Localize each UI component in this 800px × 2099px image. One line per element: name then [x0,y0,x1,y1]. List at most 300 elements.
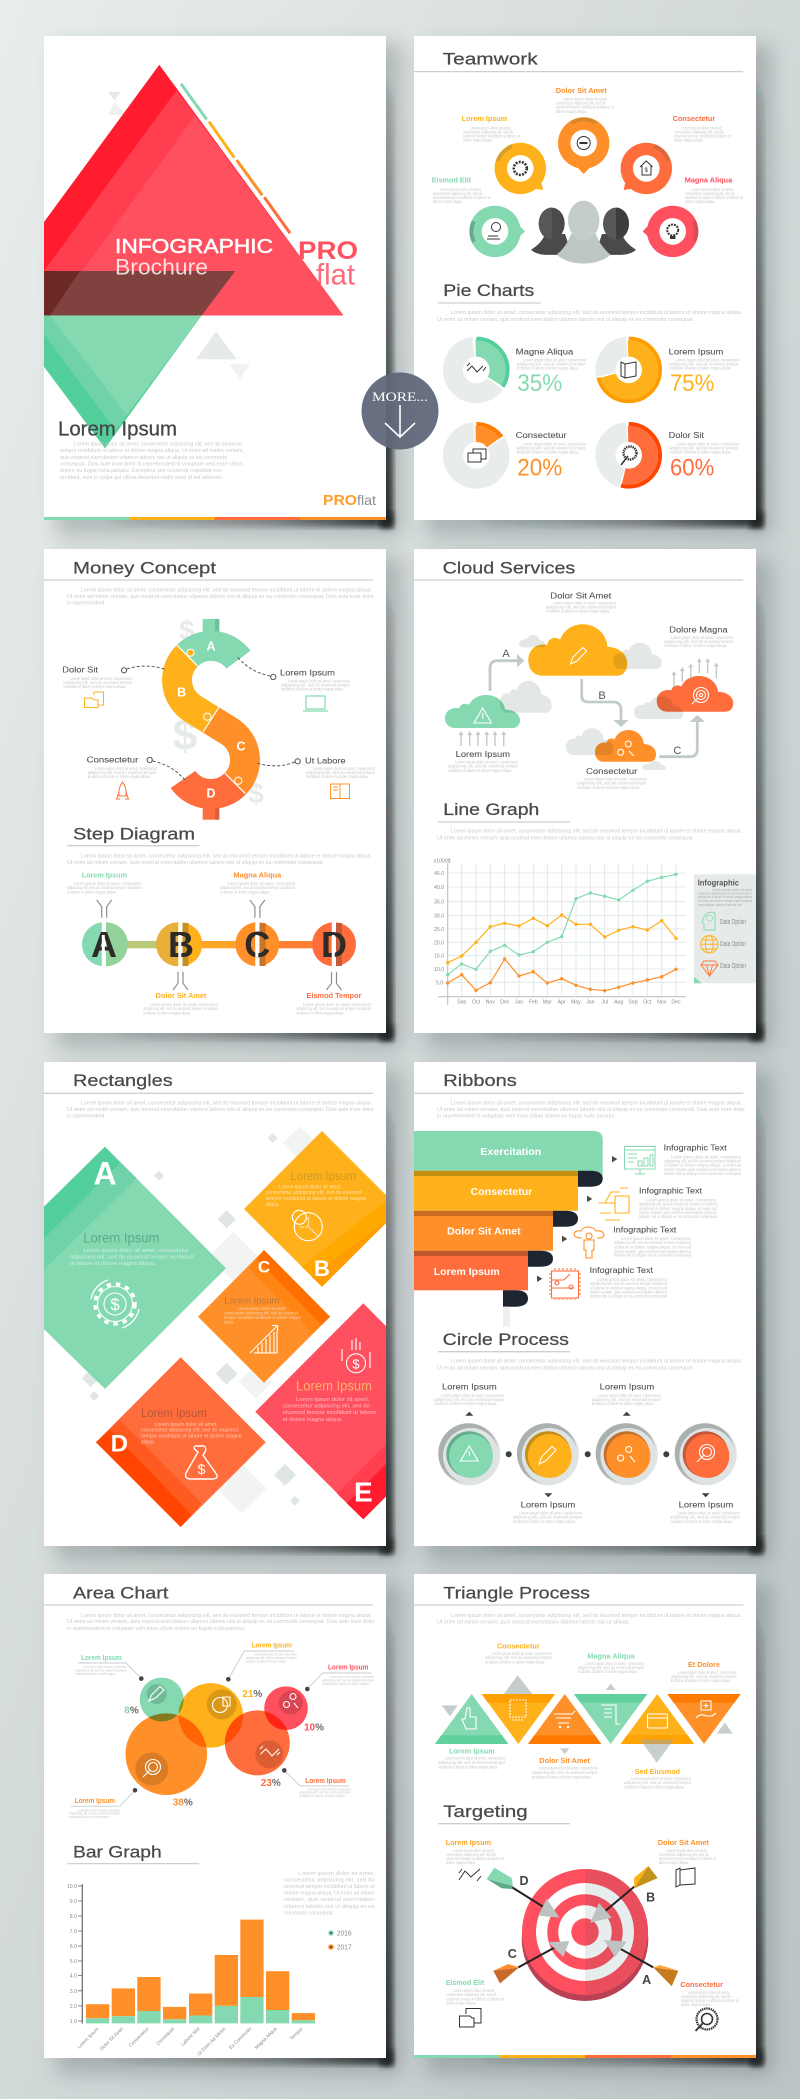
diagram: dollar puzzle [177,619,246,820]
ribbon: lorem ipsum [414,1256,528,1307]
dashed edge strokes [181,84,290,233]
labels: triangle process: Lorem ipsum dolor sit amet, consectetur [538,1766,598,1771]
body: rectangles: Ut enim ad minim veniam, quis nostrud exercitation ullamco laboris nisi ut aliquip ex ea commodo consequat. Duis aute irure dolor [67,1107,374,1113]
labels: step diagram: Lorem ipsum dolor sit amet, consectetur [227,881,295,886]
body: circle process [437,1358,742,1372]
body: bar graph: veniam, quis nostrud exercitation [284,1897,375,1903]
labels: teamwork: consectetur adipiscing elit, sed do [674,130,724,134]
chart legend panel: incididunt ut labore et dolore magna aliqua [698,895,752,899]
line chart: 35.0 [434,900,444,906]
legend: bar chart [328,1929,352,1952]
heading: teamwork: Teamwork [443,50,538,69]
diamond D: Lorem Ipsum [141,1408,207,1420]
pie chart: 35%: Lorem ipsum dolor sit amet, consectetur [523,358,586,362]
ribbon text blocks: Lorem ipsum dolor sit amet, consectetur [621,1236,691,1241]
icon: folder [460,2008,481,2027]
cover body text: consequat. Duis aute irure dolor in reprehenderit in voluptate velit esse cillum [60,462,244,468]
line chart: Jul [601,1000,608,1006]
body: pie charts [437,310,742,323]
chart legend panel: consectetur adipiscing elit sed do eiusmod tempor [698,892,753,896]
labels: teamwork: Lorem ipsum dolor sit amet, [440,187,482,192]
step D [312,920,356,968]
labels: teamwork: eiusmod tempor incididunt ut labore et [556,105,614,110]
legend: bar chart: 2017 [337,1943,352,1952]
icon: book [330,784,350,798]
labels: step diagram: Eismod Tempor [306,991,362,1000]
triangle: yellow up [621,1694,694,1744]
arrow letters [502,648,681,757]
icon: person cloud [574,1227,604,1258]
labels: money concept: incididunt ut labore et dolore magna aliqua. [63,684,126,689]
body: pie charts: Ut enim ad minim veniam, quis nostrud exercitation ullamco laboris nisi ut aliquip ex ea commodo consequat. [437,317,694,323]
bar chart: 6.0 [70,1944,77,1950]
chart legend panel: Data Option [720,941,746,948]
labels: teamwork: consectetur adipiscing elit, sed do [433,191,483,196]
diagram: dollar puzzle: B [177,686,186,700]
chart legend panel: Ut enim ad minim veniam quis nostrud [698,899,752,903]
line chart: 45.0 [434,871,444,877]
panel: triangle process and targeting [414,1584,756,2058]
labels: targeting: Consectetur [680,1980,723,1989]
labels: triangle process: Dolor Sit Amet [539,1756,590,1765]
more badge [362,372,438,450]
circle step 3 [596,1423,658,1485]
ribbon text blocks: minim veniam, quis nostrud exercitation ullamco [614,1249,691,1254]
labels: cloud services: Lorem ipsum dolor sit amet, consectetur [455,760,518,764]
body: bar graph [284,1871,375,1917]
labels: targeting: Lorem ipsum dolor sit amet, [688,1990,730,1995]
diamond C: aliqua. [224,1319,234,1324]
labels: area chart: incididunt ut labore et dolore magna [322,1682,370,1686]
bar chart: 5.0 [70,1959,77,1965]
labels: teamwork: Lorem Ipsum [462,114,507,123]
panel: rectangles [44,1074,386,1527]
ribbon text blocks: Lorem ipsum dolor sit amet, consectetur [646,1197,716,1202]
heading: targeting: Targeting [443,1802,528,1821]
ribbon: consectetur: Consectetur [471,1186,532,1198]
diamond E: Lorem Ipsum [296,1379,372,1394]
labels: circle process: Lorem ipsum dolor sit amet, consectetur [598,1393,661,1398]
labels: money concept: incididunt ut labore et dolore magna aliqua. [306,774,369,779]
labels: area chart: Lorem ipsum dolor sit amet, consectetur [77,1808,120,1812]
body: rectangles [67,1100,374,1120]
labels: triangle process: Magna Aliqua [587,1652,635,1661]
pie chart: 60% [597,424,739,487]
labels: targeting: consectetur adipiscing elit, sed do [659,1852,709,1857]
labels: targeting: consectetur adipiscing elit, sed do [681,1994,731,1999]
bubble chart [126,1678,308,1795]
body: ribbons: Ut enim ad minim veniam, quis nostrud exercitation ullamco laboris nisi ut aliquip ex ea commodo consequat. Duis aute irure dolor [437,1107,745,1113]
bar chart: 8.0 [70,1914,77,1920]
labels: area chart: adipiscing elit, sed do eiusmod tempor [75,1668,127,1672]
leader bullets [133,1676,310,1793]
diamond E: E [354,1477,373,1508]
labels: step diagram: Lorem ipsum dolor sit amet, consectetur [74,881,141,886]
pie chart: 75%: adipiscing elit, sed do eiusmod tempor [669,362,739,366]
labels: targeting: Dolor Sit Amet [658,1838,709,1847]
labels: cloud services: adipiscing elit, sed do eiusmod tempor [546,604,616,610]
ribbon text blocks: laboris nisi ut aliquip ex ea commodo consequat [639,1214,717,1219]
labels: circle process: adipiscing elit, sed do eiusmod tempor [434,1397,504,1402]
bar chart: Dolor Sit Amet [99,2026,125,2052]
heading: cloud services: Cloud Services [443,558,575,577]
small triangles [465,1412,710,1497]
triangle: green down [574,1694,647,1744]
line chart: Oct [643,1000,652,1006]
bar chart: Ut Enim Ad Minim [196,2026,227,2057]
colour footer bar [414,2055,756,2058]
labels: triangle process: Lorem ipsum dolor sit amet, consectetur [631,1776,691,1781]
labels: teamwork: Lorem ipsum dolor sit amet, [692,187,734,192]
labels: circle process: incididunt ut labore et dolore magna aliqua. [592,1401,655,1406]
pie chart: 60%: Dolor Sit [669,430,705,440]
heading: circle process: Circle Process [443,1330,569,1349]
labels: step diagram: Lorem ipsum dolor sit amet, consectetur [303,1002,371,1007]
labels: triangle process: incididunt ut labore et dolore magna aliqua. [671,1678,731,1683]
labels: triangle process [438,1641,737,1789]
diamond A: adipiscing elit, sed do eiusmod tempor incididunt [70,1254,195,1260]
grey small triangles [442,1675,733,1754]
labels: area chart: incididunt ut labore et dolore magna [299,1794,346,1798]
pie chart: 75%: 75% [670,370,714,397]
labels: teamwork: dolore magna aliqua. [556,109,588,114]
circle step 1 [438,1423,500,1485]
labels: circle process: adipiscing elit, sed do eiusmod tempor [513,1515,583,1520]
line chart: Nov [657,1000,667,1006]
labels: triangle process: Lorem ipsum dolor sit amet, consectetur [445,1756,506,1761]
bar chart [67,1884,315,2057]
labels: circle process: adipiscing elit, sed do eiusmod tempor [592,1397,661,1402]
ribbon text blocks: adipiscing elit, sed do eiusmod tempor incididunt [590,1281,668,1286]
arrow letters: C [673,745,681,757]
labels: step diagram: Lorem Ipsum [82,871,127,880]
icon: laptop [303,696,328,711]
step A: A [91,924,117,965]
body: bar graph: consectetur adipiscing elit, sed do [284,1878,375,1884]
cover body text: quis nostrud exercitation ullamco laboris nisi ut aliquip ex ea commodo [60,455,227,461]
pie chart: 20% [445,424,586,487]
ribbon shadow [503,1307,510,1327]
icon: folder [84,692,104,708]
labels: cloud services: Dolor Sit Amet [550,590,612,600]
bar chart: Labore Nisi [180,2026,201,2048]
icon: chip [549,1268,581,1300]
labels: money concept: incididunt ut labore et dolore magna aliqua. [88,774,151,779]
labels: triangle process: Consectetur [497,1641,540,1650]
labels: cloud services: incididunt ut labore et dolore magna aliqua. [448,768,512,773]
body: step diagram [67,854,372,866]
labels: circle process: Lorem ipsum dolor sit amet, consectetur [519,1510,582,1516]
ribbon text blocks: minim veniam, quis nostrud exercitation ullamco [664,1167,741,1172]
labels: step diagram: adipiscing elit, sed do eiusmod tempor incididunt [67,885,142,890]
icon: orange speech bubble [552,111,616,175]
labels: circle process: Lorem ipsum dolor sit amet, consectetur [441,1393,504,1398]
step B [156,920,202,968]
labels: step diagram [67,871,372,1016]
ribbon text blocks: adipiscing elit, sed do eiusmod tempor incididunt [664,1159,742,1164]
bar chart: Ex Commodo [228,2026,253,2051]
labels: targeting: consectetur adipiscing elit, sed do [446,1852,496,1857]
cloud: coral [657,676,733,712]
ribbon text blocks: ut labore et dolore magna aliqua. Ut enim ad [664,1163,741,1168]
line chart: Jan [515,1000,523,1006]
line chart: 30.0 [434,914,444,920]
cover body text: dolore eu fugiat nulla pariatur. Excepteur sint occaecat cupidatat non [60,468,222,474]
ribbon text blocks: adipiscing elit, sed do eiusmod tempor incididunt [639,1202,717,1207]
body: line graph: Ut enim ad minim veniam, quis nostrud exercitation ullamco laboris nisi ut aliquip ex ea commodo consequat. [437,835,694,841]
cloud: yellow [528,624,627,676]
grey overlay triangle [640,1740,674,1763]
labels: circle process: Lorem Ipsum [442,1382,497,1392]
labels: triangle process: Lorem ipsum dolor sit amet, consectetur [678,1670,737,1675]
percent labels: 23% [261,1778,281,1789]
body: bar graph: commodo consequat. [284,1911,334,1917]
diamond D: consectetur adipiscing elit, sed do eiusmod [141,1428,238,1434]
diamond D [96,1357,266,1527]
labels: teamwork: consectetur adipiscing elit, sed do [463,130,513,134]
labels: money concept: Consectetur [87,755,138,765]
body: ribbons: in reprehenderit in voluptate velit esse cillum dolore eu fugiat nulla pariatur. [437,1114,616,1120]
labels: cloud services: adipiscing elit, sed do eiusmod tempor [577,780,647,786]
labels: money concept: Dolor Sit [62,665,99,675]
labels: money concept [62,665,375,779]
labels: circle process: incididunt ut labore et dolore magna aliqua. [670,1519,733,1524]
labels: area chart: Lorem Ipsum [328,1663,369,1672]
diamond B: consectetur adipiscing elit, sed do eiusmod [266,1190,362,1196]
icon: red speech bubble [641,200,704,263]
labels: teamwork: consectetur adipiscing elit, sed do [685,191,735,196]
green diamond [44,315,202,448]
small up arrows [458,658,719,746]
line chart: Feb [529,1000,538,1006]
diamond E: Lorem ipsum dolor sit amet, [296,1397,369,1403]
line chart: Sep [457,1000,466,1006]
diagram: dollar puzzle: C [236,740,246,754]
labels: area chart: incididunt ut labore et dolore magna [246,1660,287,1664]
leader lines [71,1651,372,1806]
labels: step diagram: adipiscing elit, sed do eiusmod tempor incididunt [143,1006,219,1011]
dart B [590,1866,658,1923]
ribbon text blocks: adipiscing elit, sed do eiusmod tempor incididunt [614,1240,692,1245]
bar chart: 4.0 [70,1974,77,1980]
panel: ribbons and circle process [414,1071,745,1524]
heading: pie charts: Pie Charts [443,281,534,300]
labels: area chart: Lorem Ipsum [252,1640,292,1649]
percent labels: 8% [124,1706,139,1717]
labels: circle process: Lorem Ipsum [600,1382,654,1392]
pie chart: 60%: Lorem ipsum dolor sit amet, consectetur [676,442,739,446]
panel: cover [44,65,386,520]
body: ribbons: Lorem ipsum dolor sit amet, consectetur adipiscing elit, sed do eiusmod tempor incididunt ut labore et dolore magna aliqua. [451,1100,742,1106]
triangle: orange down [667,1694,741,1744]
labels: targeting: eiusmod tempor incididunt ut labore et [659,1856,717,1861]
more badge: MORE... [372,389,428,404]
ribbon: lorem ipsum: Lorem Ipsum [434,1266,500,1278]
dart letters: A [642,1973,651,1987]
PRO flat logo [298,237,358,292]
diamond C: tempor incididunt ut labore et dolore magna [224,1315,301,1320]
diamond B: tempor incididunt ut labore et dolore magna [266,1196,366,1202]
diamond D: aliqua. [141,1440,155,1446]
ribbon: dolor sit amet: Dolor Sit Amet [447,1225,521,1237]
labels: targeting: eiusmod tempor incididunt ut labore et [446,1996,505,2001]
icon: green speech bubble [464,200,526,263]
heading: triangle process: Triangle Process [443,1584,590,1602]
line chart: 40.0 [434,885,444,891]
labels: targeting: dolore magna aliqua. [446,2000,476,2006]
body: triangle process: Ut enim ad minim veniam, quis nostrud exercitation ullamco laboris nisi ut aliquip. [437,1619,630,1625]
labels: cloud services: incididunt ut labore et dolore magna aliqua. [546,608,610,614]
line chart: 5.0 [436,980,443,986]
diamond E: et dolore magna aliqua. [283,1417,343,1423]
labels: area chart: incididunt ut labore et dolore magna [75,1672,116,1676]
body: area chart [67,1613,375,1632]
pie chart: 75% [597,339,739,401]
body: money concept: Lorem ipsum dolor sit amet, consectetur adipiscing elit, sed do eiusmod tempor incididunt ut labore et dolore magna aliqua. [81,588,372,594]
cover title [115,235,273,280]
cloud: green [445,695,520,728]
body: money concept [67,588,374,607]
labels: teamwork: dolore magna aliqua. [433,199,463,204]
labels: circle process: incididunt ut labore et dolore magna aliqua. [513,1519,576,1524]
labels: money concept: adipiscing elit, sed do eiusmod tempor [88,770,157,775]
labels: teamwork: Dolor Sit Amet [556,86,607,95]
pie chart: 35%: incididunt ut labore et dolore magna aliqua. [517,366,579,370]
ribbon text blocks: Lorem ipsum dolor sit amet, consectetur [597,1277,667,1282]
line chart: Nov [486,1000,495,1006]
icon: team of people [531,201,636,264]
diamond A: Lorem Ipsum [83,1230,159,1245]
bar chart: 9.0 [70,1899,77,1905]
labels: triangle process: adipiscing elit, sed do eiusmod tempor [578,1665,645,1670]
decorative dollar signs [173,615,264,809]
diagram: dollar puzzle: A [206,640,216,654]
body: bar graph: Lorem ipsum dolor sit amet, [298,1871,375,1877]
decorative dollar signs: $ [179,615,195,646]
labels: circle process: Lorem Ipsum [679,1500,733,1510]
chart legend panel: Data Option [720,919,746,926]
small logo [323,492,376,509]
line chart: Dec [500,1000,510,1006]
labels: targeting: Lorem ipsum dolor sit amet, [666,1848,708,1853]
labels: triangle process: adipiscing elit, sed do eiusmod tempor [438,1760,506,1765]
circle step 4 [675,1423,737,1485]
decorative dollar signs: $ [173,711,197,760]
bar chart: Tempor [289,2026,305,2042]
pie chart: 75%: Lorem ipsum dolor sit amet, consectetur [676,358,739,362]
labels: money concept: adipiscing elit, sed do eiusmod tempor [63,680,133,685]
body: rectangles: in reprehenderit. [67,1114,106,1120]
body: ribbons [437,1100,745,1120]
diamond D: Lorem ipsum dolor sit amet, [154,1422,218,1428]
labels: area chart: adipiscing elit, sed do eiusmod tempor [69,1812,121,1816]
ribbon text blocks: laboris nisi ut aliquip ex ea commodo consequat [590,1294,668,1299]
labels: area chart: Lorem Ipsum [305,1776,346,1785]
heading: area chart: Area Chart [73,1584,169,1602]
body: area chart: in reprehenderit in voluptate velit esse cillum dolore eu fugiat nulla pariatur. [67,1626,246,1632]
diamond C: consectetur adipiscing elit, sed do eiusmod [224,1311,299,1316]
percent labels: 38% [173,1798,193,1808]
labels: step diagram: ut labore et dolore magna aliqua. [143,1010,191,1016]
step connector bars [126,941,313,948]
line chart: Dec [671,1000,681,1006]
triangle: green up [435,1694,508,1744]
pie chart: 20%: adipiscing elit, sed do eiusmod tempor [517,446,586,450]
cover body text: proident, sunt in culpa qui officia deserunt mollit anim id est laborum. [60,475,223,481]
ribbon text blocks: Infographic Text [639,1185,703,1195]
labels: area chart: Lorem Ipsum [75,1796,115,1805]
heading: ribbons: Ribbons [443,1071,517,1090]
labels: step diagram: ut labore et dolore magna aliqua. [220,889,270,894]
labels: money concept: Lorem ipsum dolor sit amet, consectetur [70,676,132,681]
labels: triangle process: incididunt ut labore et dolore magna aliqua. [485,1660,545,1664]
labels: area chart: adipiscing elit, sed do eiusmod tempor [246,1656,297,1660]
line chart: 25.0 [434,927,444,933]
bar chart: Consectetur [128,2026,151,2049]
labels: targeting: Lorem ipsum dolor sit amet, [453,1988,495,1993]
dart letters [508,1874,655,1987]
chart legend panel: Data Option [720,963,746,970]
body: rectangles: Lorem ipsum dolor sit amet, consectetur adipiscing elit, sed do eiusmod tempor incididunt ut labore et dolore magna aliqua. [81,1100,372,1106]
bar chart: Lorem Ipsum [76,2026,100,2050]
labels: cloud services: Consectetur [586,766,637,776]
labels: triangle process: Et Dolore [688,1660,720,1669]
labels: area chart: incididunt ut labore et dolore magna [69,1815,110,1819]
diamond D: $ [198,1461,206,1477]
labels: circle process: Lorem Ipsum [521,1500,575,1510]
cover body text: tempor incididunt ut labore et dolore magna aliqua. Ut enim ad minim veniam, [60,448,244,454]
labels: circle process: adipiscing elit, sed do eiusmod tempor [670,1515,740,1520]
labels: teamwork: dolore magna aliqua. [674,138,704,143]
line chart [434,858,686,1006]
labels: triangle process: incididunt ut labore et dolore magna aliqua. [438,1764,498,1769]
diamond A: $ [110,1295,120,1314]
labels: teamwork: consectetur adipiscing elit, sed do [556,101,606,106]
heading: money concept: Money Concept [73,558,216,577]
pie chart: 75%: Lorem Ipsum [669,347,723,357]
labels: teamwork: Lorem ipsum dolor sit amet, [681,126,723,130]
labels: area chart: adipiscing elit, sed do eiusmod tempor [299,1791,352,1795]
arrow letters: A [502,648,510,660]
ribbon: exercitation [414,1131,603,1187]
labels: cloud services: adipiscing elit, sed do eiusmod tempor [448,764,518,768]
circle step 2 [517,1423,579,1485]
labels: money concept: adipiscing elit, sed do eiusmod tempor [281,682,350,688]
line chart: 15.0 [434,954,444,960]
labels: cloud services: Lorem ipsum dolor sit amet, consectetur [671,635,733,640]
body: triangle process: Lorem ipsum dolor sit amet, consectetur adipiscing elit, sed do eiusmod tempor incididunt ut labore et dolore magna aliqua. [451,1613,742,1619]
ribbon text blocks: Infographic Text [613,1224,677,1234]
body: bar graph: eiusmod tempor incididunt ut labore et [284,1884,375,1890]
percent labels: 21% [242,1689,262,1700]
labels: area chart: Lorem ipsum dolor sit amet, consectetur [83,1665,127,1669]
labels: teamwork: Consectetur [673,114,715,123]
line chart: Sep [628,1000,638,1006]
labels: circle process: Lorem ipsum dolor sit amet, consectetur [677,1510,740,1516]
pie chart: 20%: Consectetur [516,430,567,440]
pie chart: 60%: incididunt ut labore et dolore magna aliqua. [669,450,731,454]
labels: targeting: dolore magna aliqua. [659,1860,689,1865]
cover title: INFOGRAPHIC [115,235,273,258]
pie chart: 35%: 35% [517,370,562,397]
body: area chart: Lorem ipsum dolor sit amet, consectetur adipiscing elit, sed do eiusmod tempor incididunt ut labore et dolore magna aliqua. [81,1613,372,1619]
diamond A [44,1147,226,1389]
clouds background [500,635,683,770]
icon: zigzag [459,1869,481,1881]
body: circle process: Ut enim ad minim veniam, quis nostrud exercitation ullamco laboris nisi ut aliquip ex ea commodo consequat. [437,1366,694,1372]
heading: bar graph: Bar Graph [73,1842,162,1861]
bar chart: 7.0 [70,1929,77,1935]
